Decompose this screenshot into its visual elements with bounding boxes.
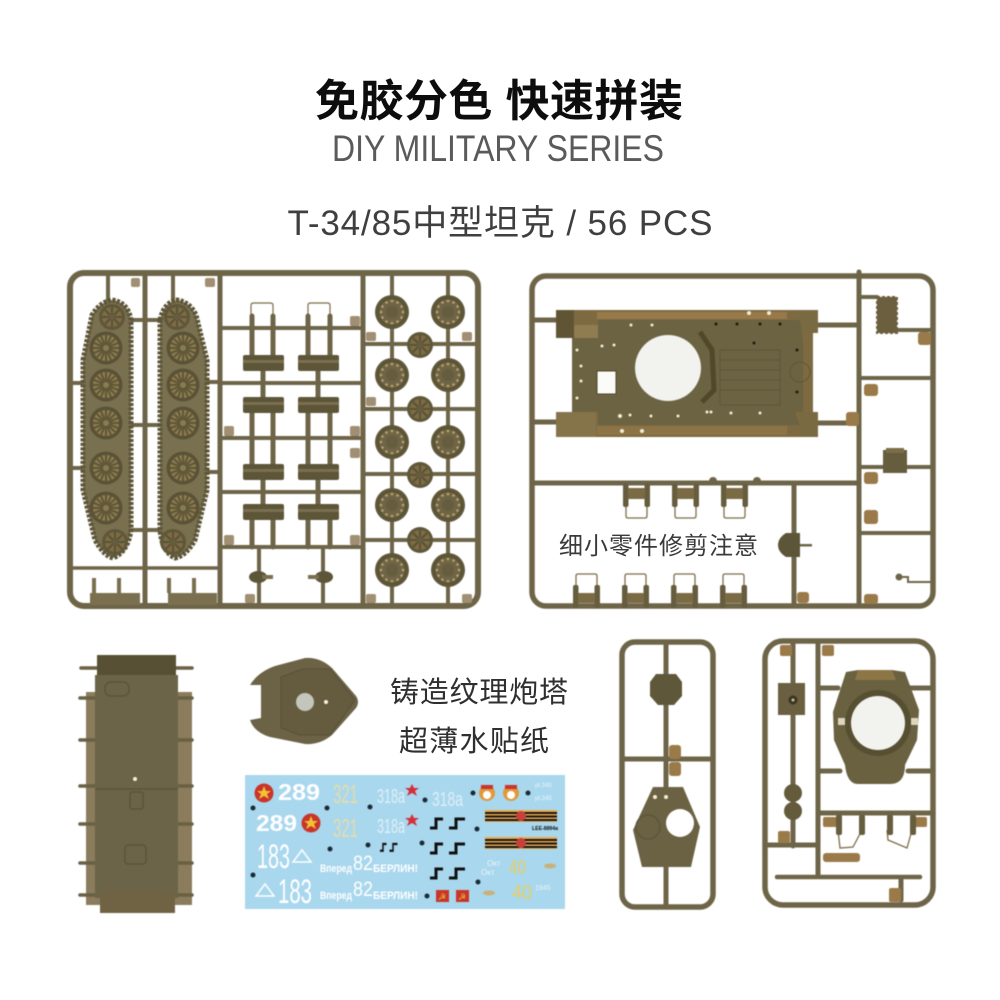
square part [778,683,805,715]
panel: hull top sprue [532,272,933,608]
track left [83,300,131,558]
small print: pt.345 [535,783,552,789]
emblems: ☭ [458,892,466,902]
unit markings [377,786,464,838]
red stars [405,784,419,826]
panel: hull underside part [80,655,192,913]
caption: cast turret texture: 铸造纹理炮塔 [390,676,568,709]
roundels [254,784,320,832]
round parts [784,784,802,820]
triangles [256,850,311,896]
slogans [320,852,418,902]
panel: decal sheet [245,775,565,911]
slogans: БЕРЛИН! [373,890,418,902]
gate tabs [797,332,931,604]
small print: Окт [487,859,501,868]
small print: Окт [481,868,495,877]
tactical numbers: 183 [257,838,290,876]
gate tabs [669,745,681,759]
tan side rails [86,692,192,905]
caption: ultra-thin decals: 超薄水贴纸 [399,725,549,758]
turret shell [833,670,919,784]
yellow numbers: 40 [509,857,526,879]
slogans: БЕРЛИН! [373,863,418,875]
small round part [778,533,931,582]
unit markings: 318a [377,786,406,808]
gate tabs [131,278,472,603]
tactical numbers: 289 [278,779,320,805]
yellow numbers [509,857,532,904]
model heading: T-34/85中型坦克 / 56 PCS [288,204,712,243]
upper clips [623,477,761,518]
clips [838,830,912,848]
emblems: ☭ [438,892,446,902]
slogans: 82 [353,852,373,875]
track right [160,300,207,558]
pale yellow numbers [333,779,358,843]
sprue frame and runners [532,272,933,606]
octagonal part [650,674,682,705]
turret plate [633,787,700,867]
subtitle: DIY MILITARY SERIES [332,128,664,169]
small print: 1945 [535,885,551,892]
sprue frame and runners [622,642,713,907]
small track parts [90,578,217,605]
gate tabs [778,645,927,902]
road wheel axles and cylinders [243,303,339,583]
small print [481,783,552,892]
unit markings: 318a [432,789,464,811]
unit markings: 318a [377,816,406,838]
guards badges [479,785,519,801]
turret top part [250,658,358,744]
slogans: Вперед [320,890,352,902]
turret ring opening [635,335,701,401]
ribbons [485,810,557,849]
clip handles [836,815,916,835]
small print: pt.345 [535,796,552,802]
title: 免胶分色 快速拼装 [315,77,683,126]
sprue frame and runners [70,273,478,606]
sheet code: LEE-8894a [532,826,558,832]
panel: turret plate sprue [622,642,713,907]
slogans: Вперед [320,863,352,875]
emblems [436,864,556,902]
lower clips [573,574,747,608]
rear band [100,890,175,913]
axle stubs [80,668,192,895]
note: careful trimming small parts: 细小零件修剪注意 [559,533,758,560]
panel: track and wheel sprue [70,273,478,606]
road wheels [375,295,465,587]
front band [97,655,176,675]
pale yellow numbers: 321 [333,813,358,843]
tactical numbers [256,779,320,911]
grille parts [877,297,907,473]
tactical numbers: 183 [278,873,312,911]
slogans: 82 [353,878,373,901]
square opening [597,371,616,394]
panel details [95,682,178,864]
tactical numbers: 289 [256,810,297,836]
hull body [95,675,178,898]
pale yellow numbers: 321 [333,779,358,809]
black tactical symbols [380,819,465,878]
panel: turret body sprue [765,641,933,905]
sprue frame and runners [765,641,933,905]
yellow numbers: 40 [512,882,532,904]
number dots [250,790,530,898]
hull interior part [556,310,818,437]
